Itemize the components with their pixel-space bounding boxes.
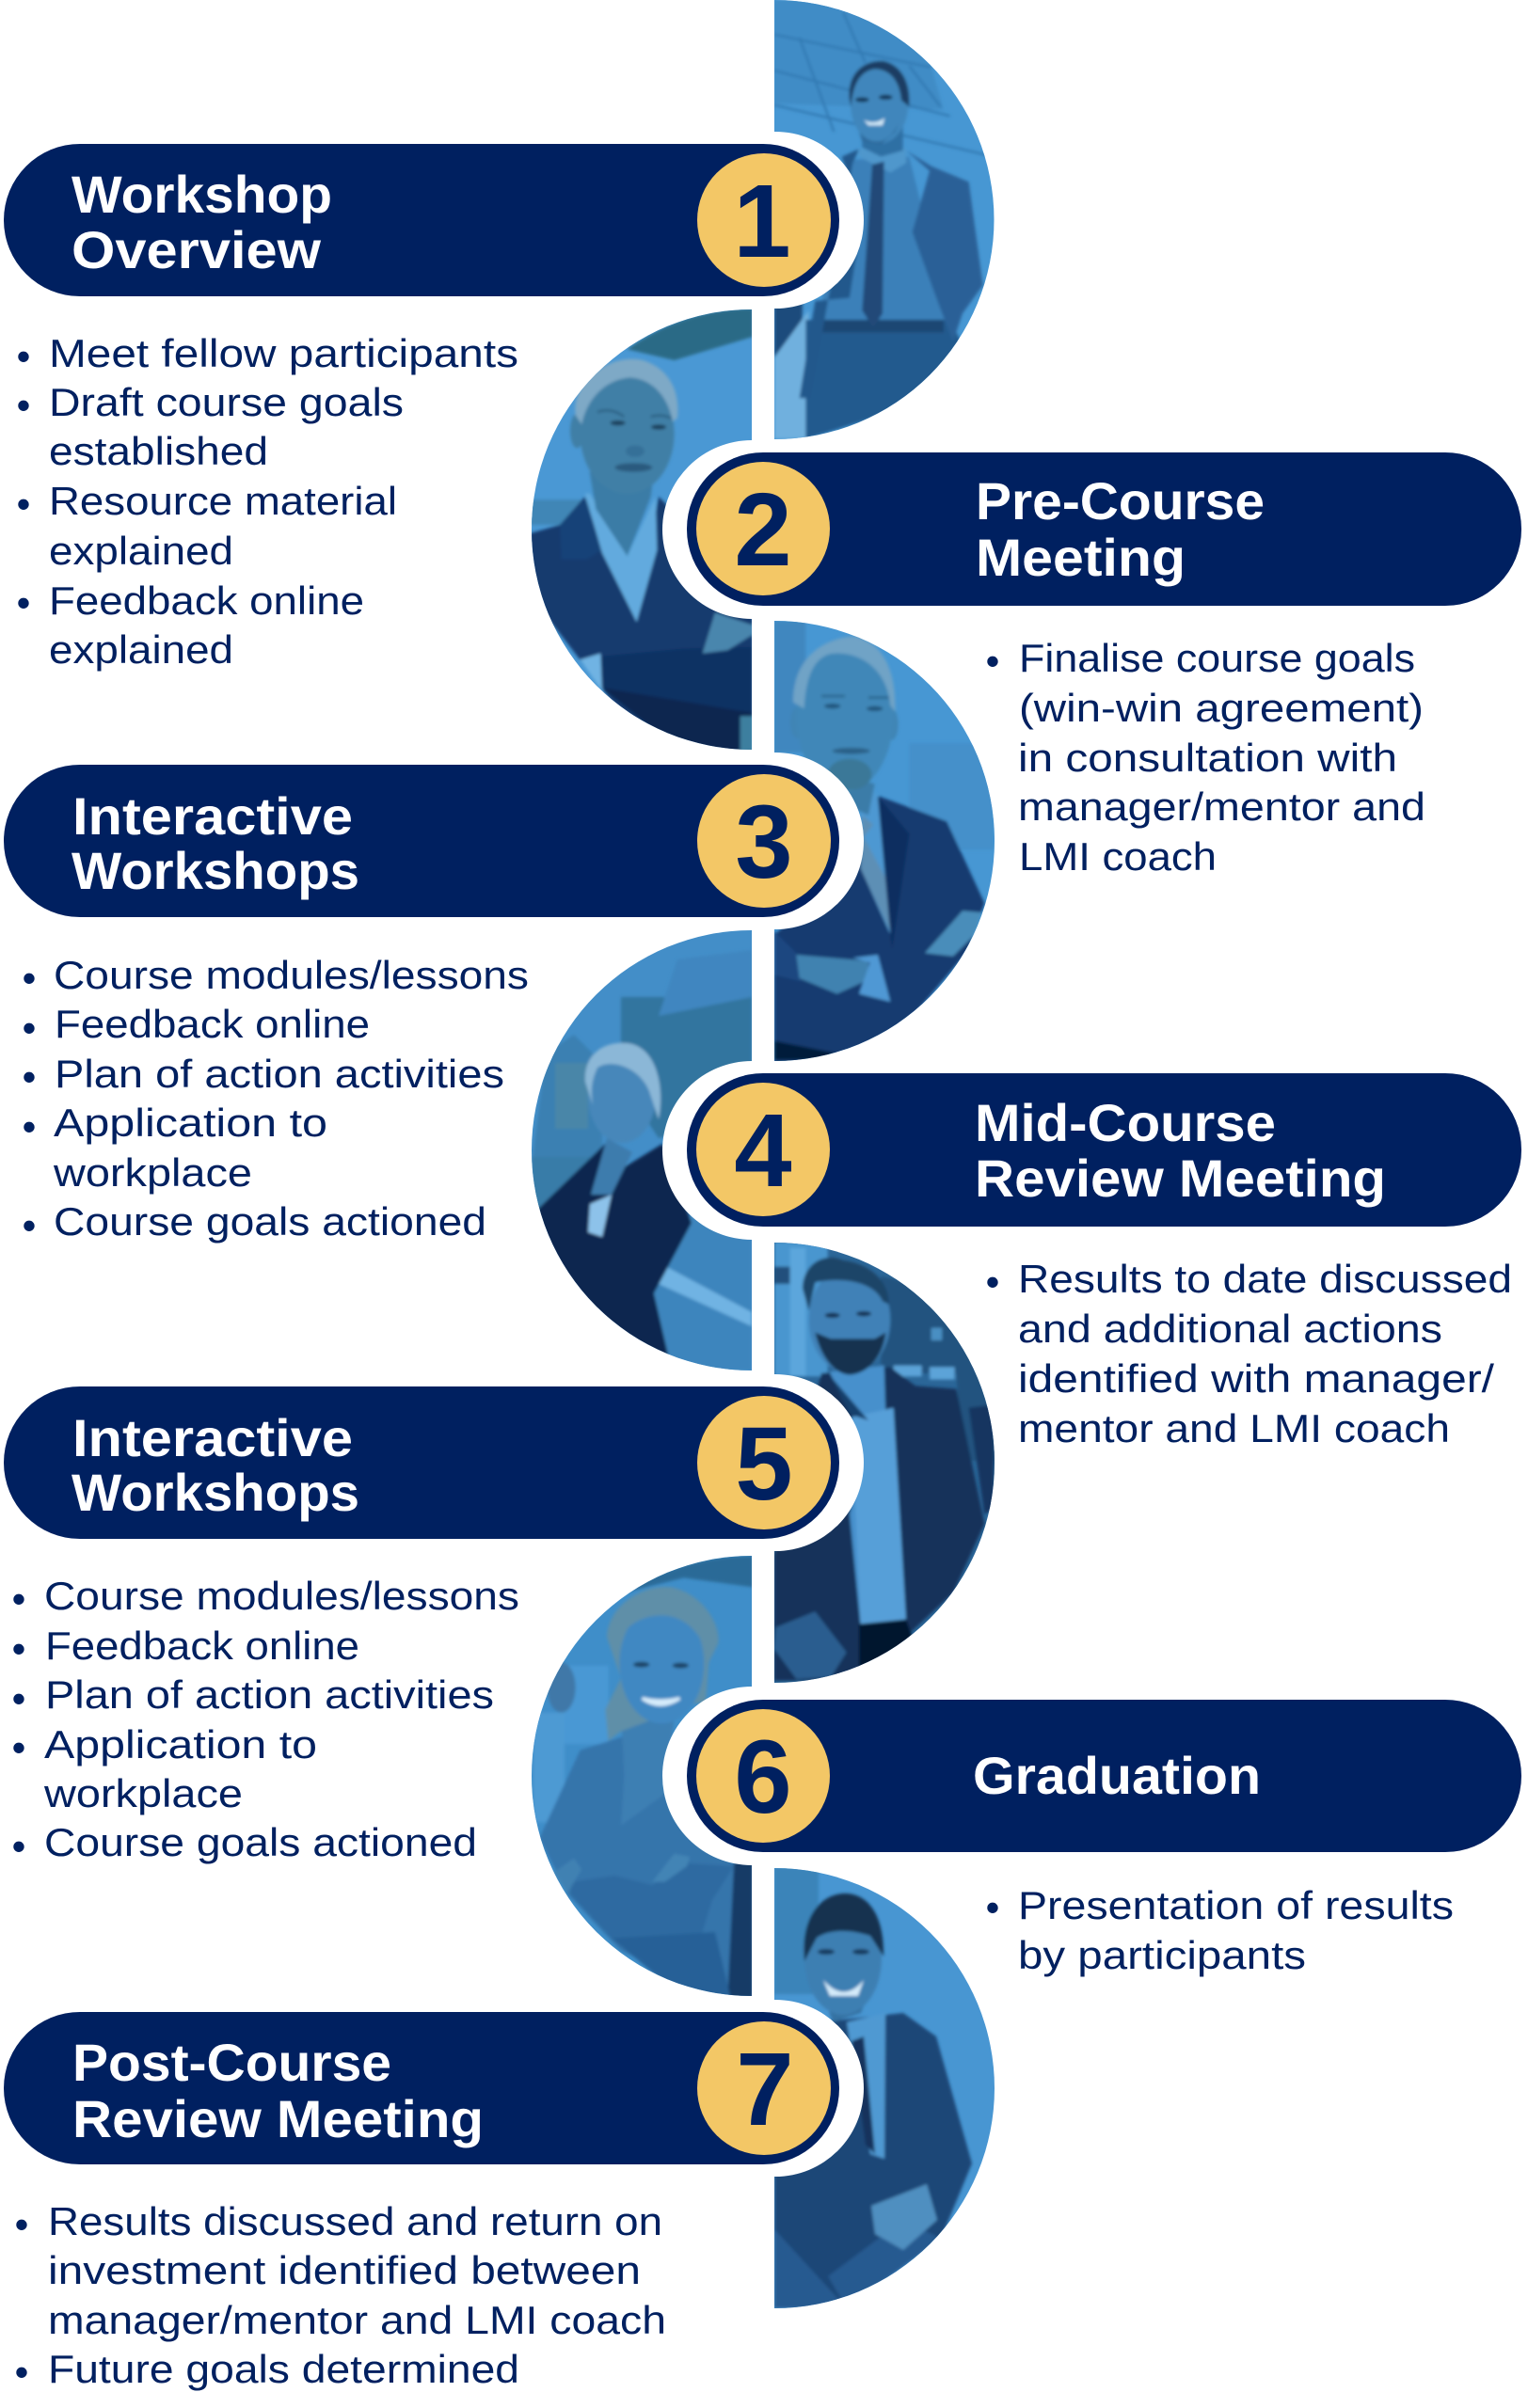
number badge 6: [696, 1709, 830, 1843]
bullet list: •: [23, 1006, 36, 1050]
heading: [975, 1093, 1386, 1208]
white cut-out ring: [662, 1061, 841, 1240]
bullet list: Course modules/lessons: [44, 1574, 519, 1618]
bullet list: Finalise course goals: [1019, 636, 1415, 680]
number badge 7: [697, 2021, 831, 2155]
bullet list: •: [23, 1054, 36, 1099]
number badge 3: 3: [735, 784, 793, 900]
heading: [72, 1408, 359, 1522]
bullet list: Course goals actioned: [44, 1820, 477, 1864]
number badge 7: 7: [736, 2032, 794, 2147]
banner pill: [4, 1386, 839, 1539]
step 6: Graduation: [527, 1552, 1521, 1999]
number badge 2: 2: [734, 472, 792, 588]
number badge 2: [696, 462, 830, 595]
bullet list: •: [17, 482, 30, 526]
bullet list: •: [15, 2202, 28, 2246]
bullet list: Presentation of results: [1018, 1883, 1454, 1927]
step 5: Interactive Workshops: [4, 1242, 1000, 1868]
heading: Mid-Course: [975, 1093, 1276, 1152]
white cut-out ring: [687, 1374, 864, 1551]
bullet list: •: [986, 1259, 999, 1304]
bullet list: Draft course goals: [49, 380, 404, 424]
photo: blonde woman before office buildings: [522, 927, 753, 1383]
number badge 6: 6: [734, 1719, 792, 1835]
photo: smiling man in suit and tie: [774, 0, 1000, 442]
bullet list: •: [15, 2350, 28, 2394]
banner pill: [687, 1700, 1521, 1852]
heading: Workshops: [72, 841, 359, 900]
bullet list: (win-win agreement): [1019, 686, 1424, 730]
banner pill: [687, 1073, 1521, 1227]
heading: Pre-Course: [976, 471, 1265, 531]
bullet list: •: [12, 1676, 25, 1720]
number badge 3: [697, 774, 831, 908]
heading: Workshops: [72, 1463, 359, 1522]
bullet list: in consultation with: [1018, 736, 1397, 780]
bullet list: Results discussed and return on: [48, 2199, 662, 2243]
heading: [976, 471, 1265, 587]
bullet list: by participants: [1018, 1933, 1306, 1977]
bullet list: •: [986, 1885, 999, 1929]
bullet list: [12, 1574, 519, 1868]
bullet list: [986, 1883, 1454, 1977]
step 3: Interactive Workshops: [4, 616, 1000, 1247]
bullet list: Plan of action activities: [55, 1052, 504, 1096]
bullet list: [15, 2199, 666, 2394]
bullet list: [17, 331, 518, 672]
heading: Overview: [72, 220, 321, 279]
bullet list: Feedback online: [55, 1002, 370, 1046]
banner pill: [4, 765, 839, 917]
number badge 5: 5: [735, 1406, 793, 1522]
bullet list: Course modules/lessons: [54, 953, 529, 997]
bullet list: LMI coach: [1019, 834, 1217, 879]
number badge 5: [697, 1396, 831, 1529]
heading: Workshop: [72, 165, 332, 224]
bullet list: [986, 1257, 1512, 1450]
bullet list: •: [17, 334, 30, 378]
step 2: Pre-Course Meeting: [527, 306, 1521, 879]
banner pill: [4, 2012, 839, 2164]
bullet list: Application to: [54, 1101, 327, 1145]
bullet list: Resource material: [49, 479, 397, 523]
bullet list: •: [23, 956, 36, 1000]
photo: smiling man with clasped hands: [774, 1867, 1000, 2309]
heading: Interactive: [72, 786, 353, 846]
bullet list: explained: [49, 627, 233, 672]
heading: Graduation: [973, 1746, 1261, 1805]
number badge 1: [697, 153, 831, 287]
heading: [72, 2033, 484, 2148]
white cut-out ring: [662, 440, 841, 619]
bullet list: and additional actions: [1018, 1307, 1442, 1351]
bullet list: Feedback online: [45, 1624, 359, 1668]
photo: smiling curly-haired woman in blue blazer: [527, 1552, 753, 1999]
bullet list: investment identified between: [48, 2248, 641, 2292]
number badge 1: 1: [733, 164, 791, 279]
number badge 4: [696, 1083, 830, 1216]
bullet list: •: [17, 580, 30, 625]
bullet list: •: [12, 1576, 25, 1621]
heading: Post-Course: [72, 2033, 391, 2092]
heading: Review Meeting: [72, 2089, 484, 2148]
bullet list: established: [49, 429, 268, 473]
heading: Review Meeting: [975, 1149, 1386, 1208]
bullet list: explained: [49, 529, 233, 573]
bullet list: Results to date discussed: [1018, 1257, 1512, 1301]
bullet list: workplace: [53, 1150, 252, 1195]
photo: grey-haired woman in navy blazer: [527, 306, 753, 753]
bullet list: manager/mentor and: [1018, 784, 1425, 829]
heading: Meeting: [976, 528, 1186, 587]
heading: [72, 165, 332, 279]
bullet list: [23, 953, 529, 1247]
bullet list: Meet fellow participants: [49, 331, 518, 375]
bullet list: Application to: [44, 1722, 317, 1766]
bullet list: •: [12, 1824, 25, 1868]
bullet list: Feedback online: [49, 578, 364, 623]
bullet list: Plan of action activities: [45, 1672, 494, 1717]
bullet list: Course goals actioned: [54, 1199, 486, 1244]
bullet list: •: [23, 1203, 36, 1247]
bullet list: •: [12, 1626, 25, 1671]
photo: bearded man in dark jacket: [774, 1242, 1000, 1684]
white cut-out ring: [687, 752, 864, 929]
step 4: Mid-Course Review Meeting: [522, 927, 1521, 1450]
white cut-out ring: [687, 2000, 864, 2177]
step 7: Post-Course Review Meeting: [4, 1867, 1000, 2394]
bullet list: [986, 636, 1425, 879]
number badge 4: 4: [734, 1093, 792, 1209]
heading: Interactive: [72, 1408, 353, 1467]
photo: man with arms crossed: [774, 616, 1000, 1063]
bullet list: mentor and LMI coach: [1018, 1406, 1450, 1450]
bullet list: workplace: [43, 1771, 243, 1815]
bullet list: manager/mentor and LMI coach: [48, 2298, 666, 2342]
white cut-out ring: [687, 132, 864, 309]
step 1: Workshop Overview: [4, 0, 1000, 672]
bullet list: •: [23, 1104, 36, 1149]
bullet list: •: [12, 1725, 25, 1769]
bullet list: •: [17, 383, 30, 427]
bullet list: •: [986, 639, 999, 683]
banner pill: [4, 144, 839, 296]
bullet list: Future goals determined: [48, 2347, 519, 2391]
banner pill: [687, 452, 1521, 606]
white cut-out ring: [662, 1687, 841, 1865]
heading: [72, 786, 359, 900]
bullet list: identified with manager/: [1018, 1356, 1494, 1401]
